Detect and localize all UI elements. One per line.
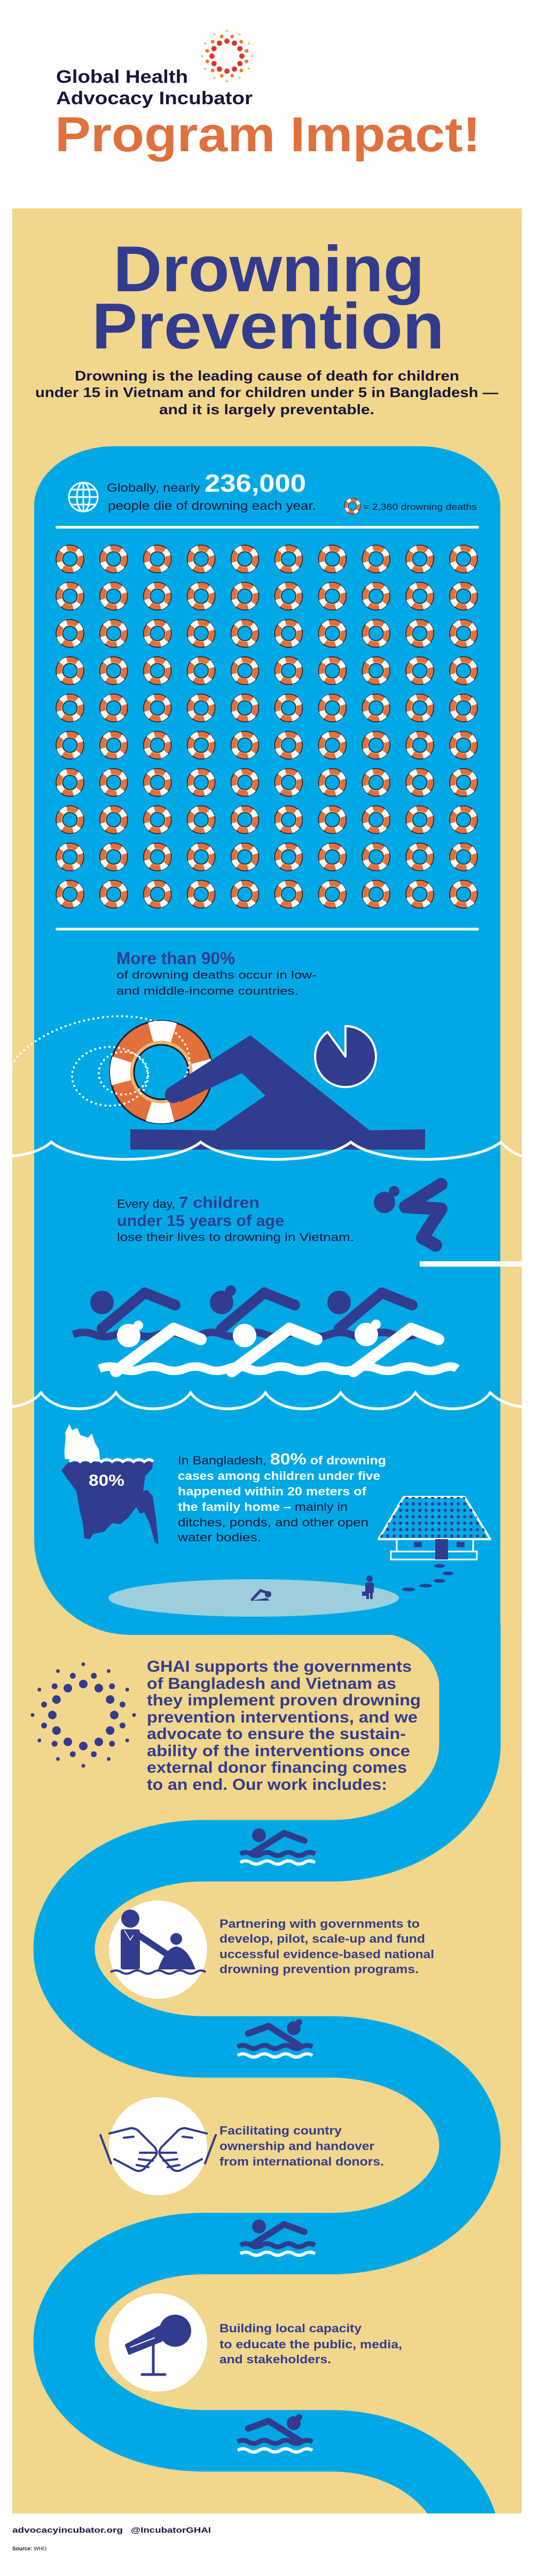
text: every day 7 children: under 15 years of age	[117, 1212, 284, 1230]
legend	[344, 498, 477, 515]
panel: blue water panel	[34, 446, 500, 1635]
logo text	[56, 67, 253, 108]
wave line 1	[12, 1142, 522, 1159]
heading: Program Impact: Program Impact!	[55, 107, 481, 162]
text: every day 7 children	[117, 1194, 354, 1244]
item 2: facilitating: from international donors.	[219, 2155, 384, 2168]
footer	[12, 2526, 211, 2552]
item 2: facilitating: Facilitating country	[219, 2124, 342, 2137]
pond	[108, 1579, 399, 1617]
stat: 236,000: Globally, nearly	[107, 481, 200, 494]
item 1: partnering: Partnering with governments to	[219, 1917, 420, 1930]
icon: globe	[69, 483, 98, 511]
text: GHAI supports	[147, 1658, 421, 1794]
text: Bangladesh 80%	[177, 1450, 386, 1544]
icon: big swimmer	[130, 1035, 425, 1150]
text: GHAI supports: advocate to ensure the sustain-	[147, 1725, 406, 1743]
icon: band swimmer 1	[240, 1828, 315, 1864]
stat: 236,000: people die of drowning each year.	[108, 499, 316, 513]
dotted ripples	[12, 1017, 190, 1106]
item 2: facilitating: ownership and handover	[219, 2139, 374, 2153]
text: Bangladesh 80%: water bodies.	[177, 1531, 261, 1544]
wave line 2	[12, 1393, 522, 1409]
text: every day 7 children: lose their lives to drowning in Vietnam.	[117, 1231, 354, 1244]
icon: GHAI dots ring	[31, 1662, 136, 1768]
text: Bangladesh 80%: In Bangladesh, 80% of drowning	[178, 1450, 386, 1468]
text: more than 90%: of drowning deaths occur in low-	[116, 969, 317, 981]
subtitle: under 15 in Vietnam and for children under 5 in Bangladesh —	[35, 384, 498, 400]
title: Drowning Prevention: Prevention	[92, 290, 444, 362]
icon: house	[379, 1497, 490, 1559]
title: Drowning Prevention	[92, 232, 444, 362]
icon: big lifebuoy	[110, 1021, 213, 1123]
text: more than 90%	[116, 949, 317, 997]
subtitle: Drowning is the leading cause of death for children	[75, 368, 459, 384]
item 1: partnering: uccessful evidence-based national	[219, 1947, 434, 1961]
river S-curve	[64, 1625, 470, 2548]
item 3: building capacity: Building local capacity	[219, 2322, 362, 2335]
item 1: partnering	[109, 1900, 434, 1999]
chart: 100 lifebuoys	[48, 540, 485, 913]
icon: band swimmer 2	[238, 2019, 312, 2057]
text: more than 90%: More than 90%	[116, 949, 235, 968]
text: GHAI supports: to an end. Our work includes:	[147, 1776, 387, 1794]
footer: advocacyincubator.org	[12, 2526, 123, 2535]
item 1: partnering: develop, pilot, scale-up and fund	[219, 1932, 425, 1945]
icon: diver	[374, 1184, 441, 1245]
item 3: building capacity	[109, 2293, 402, 2392]
stepping stones	[402, 1564, 453, 1592]
river fillet	[374, 1633, 439, 1689]
item 3: building capacity: to educate the public, media,	[219, 2338, 402, 2351]
logo ring	[201, 30, 253, 82]
subtitle	[35, 368, 498, 417]
stat: 236,000	[107, 469, 316, 513]
logo text: Global Health	[56, 67, 188, 87]
text: Bangladesh 80%: the family home – mainly in	[178, 1500, 348, 1514]
item 2: facilitating	[100, 2097, 384, 2195]
text: GHAI supports: prevention interventions, and we	[147, 1709, 418, 1726]
item 1: partnering: drowning prevention programs.	[219, 1962, 419, 1976]
text: every day 7 children: Every day, 7 children	[117, 1194, 260, 1212]
text: GHAI supports: GHAI supports the governments	[147, 1658, 412, 1675]
text: GHAI supports: external donor financing comes	[147, 1759, 407, 1776]
text: GHAI supports: of Bangladesh and Vietnam as	[147, 1675, 396, 1693]
icon: three swimmers	[73, 1285, 457, 1371]
text: Bangladesh 80%: ditches, ponds, and other open	[178, 1516, 368, 1529]
text: GHAI supports: they implement proven drowning	[147, 1692, 421, 1709]
icon: Bangladesh map	[61, 1424, 159, 1545]
icon: pie 90%	[315, 1026, 376, 1087]
text: Bangladesh 80%: cases among children under five	[178, 1469, 380, 1483]
icon: standing child	[362, 1576, 374, 1599]
icon: band swimmer 3	[240, 2220, 315, 2255]
title: Drowning Prevention: Drowning	[113, 232, 425, 305]
text: Bangladesh 80%: happened within 20 meters of	[178, 1485, 367, 1498]
logo text: Advocacy Incubator	[56, 88, 253, 108]
footer: Source: WHO	[12, 2546, 47, 2552]
stat: 236,000: 236,000	[205, 469, 306, 497]
legend: = 2,360 drowning deaths	[363, 502, 477, 512]
text: more than 90%: and middle-income countries.	[116, 986, 299, 997]
icon: band swimmer 4	[238, 2414, 312, 2452]
text: GHAI supports: ability of the interventions once	[147, 1742, 410, 1760]
icon: Bangladesh map: 80%	[89, 1472, 124, 1489]
subtitle: and it is largely preventable.	[159, 401, 374, 417]
icon: pond swimmer	[251, 1590, 271, 1601]
footer: @IncubatorGHAI	[131, 2526, 211, 2535]
item 3: building capacity: and stakeholders.	[219, 2353, 331, 2366]
